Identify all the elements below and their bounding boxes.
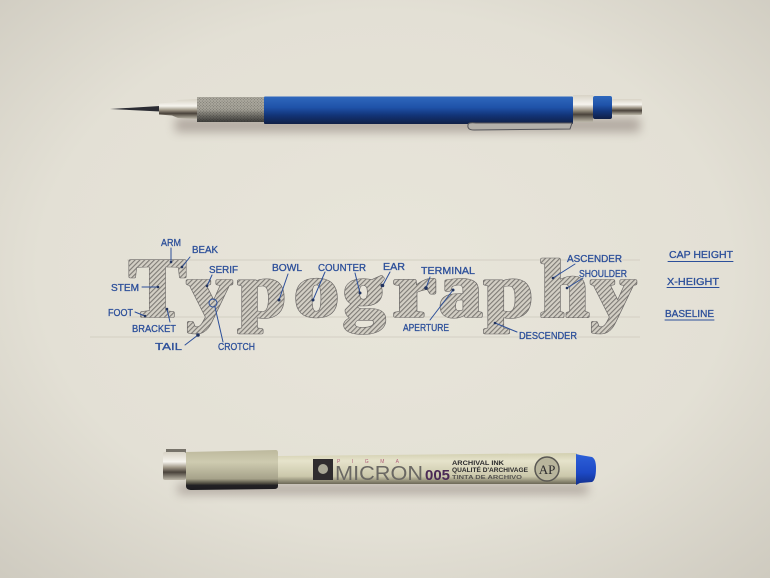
pen archival text: [452, 461, 528, 481]
pen archival text: ARCHIVAL INK: [452, 461, 505, 467]
pen shadow: [178, 484, 588, 494]
hatched word Typography: p: [484, 249, 533, 333]
label: descender: DESCENDER: [519, 330, 577, 342]
label: aperture: APERTURE: [403, 322, 449, 334]
label: beak: BEAK: [192, 244, 218, 256]
hatched word Typography: r: [393, 249, 436, 333]
label: arm: ARM: [161, 237, 181, 249]
hatched word Typography: T: [129, 242, 186, 335]
hatched word Typography: g: [343, 249, 385, 333]
mechanical pencil: [110, 95, 642, 132]
pen AP seal: AP: [539, 462, 555, 477]
leader lines: [135, 248, 583, 345]
pen brand MICRON: MICRON: [335, 463, 423, 485]
label: bowl: BOWL: [272, 262, 302, 274]
label: cap height: CAP HEIGHT: [669, 249, 734, 261]
pencil clip: [468, 123, 572, 130]
label: shoulder: SHOULDER: [579, 268, 627, 280]
word outline: o: [294, 249, 339, 333]
label: crotch: CROTCH: [218, 341, 255, 353]
word outline: a: [439, 249, 482, 333]
label: ascender: ASCENDER: [567, 253, 622, 265]
pencil blue end: [593, 96, 612, 119]
hatched word Typography: o: [294, 249, 339, 333]
label: stem: STEM: [111, 282, 139, 294]
word outline: p: [484, 249, 533, 333]
label: counter: COUNTER: [318, 262, 366, 274]
word outline: h: [540, 243, 589, 334]
guide lines: [90, 260, 640, 337]
pencil shadow: [175, 118, 640, 132]
hatched word Typography: p: [238, 249, 286, 333]
pen AP seal: [535, 457, 559, 481]
label: tail: TAIL: [155, 341, 182, 353]
pencil end cap: [612, 99, 642, 115]
word outline: y: [187, 249, 232, 333]
pen archival text: TINTA DE ARCHIVO: [452, 475, 523, 481]
pen barrel: [278, 453, 577, 484]
pencil metal cone: [159, 99, 197, 119]
label: baseline: BASELINE: [665, 308, 714, 320]
icon: logo flower: [318, 464, 328, 474]
pencil lead tip: [110, 106, 160, 112]
pencil knurled grip: [197, 97, 264, 122]
label: bracket: BRACKET: [132, 323, 177, 335]
hatched word Typography: y: [187, 249, 232, 333]
label: serif: SERIF: [209, 264, 238, 276]
pen archival text: QUALITÉ D'ARCHIVAGE: [452, 466, 528, 474]
word outline: r: [393, 249, 436, 333]
label: x-height: X-HEIGHT: [667, 276, 720, 288]
pen cap: [186, 450, 278, 490]
pencil blue body: [264, 96, 573, 124]
pen logo: [313, 459, 333, 480]
word outline: p: [238, 249, 286, 333]
typography diagram: [90, 237, 734, 353]
Pigma Micron pen: [163, 449, 596, 494]
word outline: g: [343, 249, 385, 333]
pen brand PIGMA: P I G M A: [337, 459, 400, 465]
hatched word Typography: a: [439, 249, 482, 333]
pen size 005: 005: [425, 467, 450, 484]
word outline: [129, 242, 636, 335]
hatched word Typography: [129, 242, 636, 335]
pen blue tip: [576, 454, 596, 485]
hatched word Typography: h: [540, 243, 589, 334]
label: ear: EAR: [383, 261, 405, 273]
word outline: y: [591, 249, 636, 333]
label: foot: FOOT: [108, 307, 133, 319]
hatched word Typography: y: [591, 249, 636, 333]
pencil chrome ring: [573, 95, 593, 122]
pen end cap: [163, 449, 186, 480]
word outline: T: [129, 242, 186, 335]
label: terminal: TERMINAL: [421, 265, 475, 277]
